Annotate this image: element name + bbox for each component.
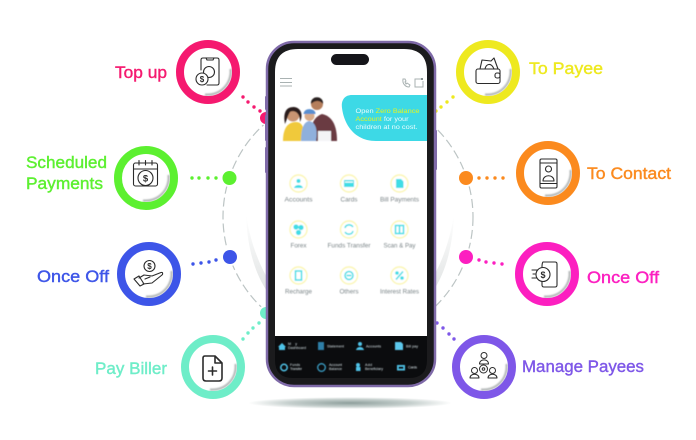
icon: phone with moving coin: $: [540, 270, 546, 280]
app: Recharge: Recharge: [285, 288, 313, 296]
item: Scheduled Payments: [26, 150, 174, 206]
phone side buttons: [265, 96, 437, 173]
dotted connectors: [190, 95, 505, 341]
label: To Payee: [529, 59, 603, 78]
phone and share icons: [403, 78, 423, 87]
nav: Accounts: Accounts: [366, 344, 381, 348]
app: Interest Rates: Interest Rates: [380, 288, 419, 296]
nav: My Dashboard: [278, 342, 306, 350]
app: Scan & Pay: Scan & Pay: [384, 242, 416, 250]
item: To Contact: [520, 145, 671, 201]
phone ground shadow: [248, 397, 452, 409]
icon: hand with coin: $: [147, 262, 152, 271]
nav: Statement: Statement: [327, 344, 344, 348]
item: Once Off (blue): [37, 246, 177, 302]
item: Top up: [115, 44, 236, 100]
nav: Add Beneficiary: Beneficiary: [365, 367, 383, 371]
banner: [342, 95, 427, 141]
nav: Account Balance: [318, 363, 342, 371]
label: Payments: [26, 174, 103, 193]
nav: Funds Transfer: Transfer: [290, 367, 303, 371]
phone body: [267, 42, 435, 386]
nav: Funds Transfer: [281, 363, 303, 371]
icon: phone with person: [540, 159, 557, 188]
banner: Account for your: [356, 116, 409, 123]
app: Funds Transfer: Funds Transfer: [328, 242, 370, 250]
nav: Statement: [318, 342, 344, 350]
banner: children at no cost.: [356, 124, 418, 131]
nav bar: [275, 336, 427, 378]
nav: Account Balance: Balance: [329, 367, 342, 371]
item: Pay Biller: [95, 339, 241, 395]
notch: [331, 54, 369, 65]
icon: document with plus: [203, 356, 222, 381]
hamburger menu icon: [280, 78, 292, 86]
timeline nodes: [220, 110, 475, 321]
icon: people around a gear: [470, 352, 497, 378]
nav: My Dashboard: My: [288, 342, 297, 346]
label: Once Off: [587, 268, 659, 287]
label: Once Off: [37, 267, 109, 286]
item: To Payee: [460, 44, 603, 100]
label: [26, 153, 107, 193]
label: Scheduled: [26, 153, 107, 172]
app grid: [284, 175, 419, 296]
nav: Add Beneficiary: [356, 363, 383, 371]
nav: Cards: [397, 365, 417, 370]
label: Top up: [115, 63, 167, 82]
icon: calendar with coin: $: [143, 174, 149, 184]
app: Accounts: Accounts: [284, 196, 312, 204]
item: Manage Payees: [456, 339, 644, 395]
nav: Account Balance: Account: [329, 363, 342, 367]
label: Manage Payees: [522, 357, 644, 376]
app: Cards: Cards: [340, 196, 358, 204]
nav: Bill pay: Bill pay: [406, 344, 418, 348]
dashed orbit: [223, 92, 473, 342]
phone: [265, 42, 437, 386]
icon: phone with moving coin: [532, 262, 557, 287]
app: Forex: Forex: [290, 242, 307, 250]
app: Others: Others: [340, 288, 358, 296]
label: To Contact: [587, 164, 671, 183]
phone screen: [275, 49, 427, 336]
inner grey crescent behind phone: [246, 215, 454, 322]
nav: My Dashboard: Dashboard: [288, 346, 306, 350]
icon: phone with coins: $: [200, 75, 205, 84]
nav: Funds Transfer: Funds: [290, 363, 300, 367]
nav: Bill pay: [395, 342, 418, 350]
icon: wallet: [476, 58, 500, 84]
item: Once Off (magenta): [519, 246, 659, 302]
banner: Open Zero Balance: [356, 108, 420, 115]
banner family photo: [283, 97, 337, 141]
nav: Accounts: [356, 342, 381, 350]
nav: Add Beneficiary: Add: [365, 363, 372, 367]
nav: Cards: Cards: [408, 366, 417, 370]
label: Pay Biller: [95, 359, 167, 378]
app: Bill Payments: Bill Payments: [380, 196, 419, 204]
bottom navigation items: [278, 342, 418, 371]
icon: calendar with coin: [134, 160, 158, 186]
